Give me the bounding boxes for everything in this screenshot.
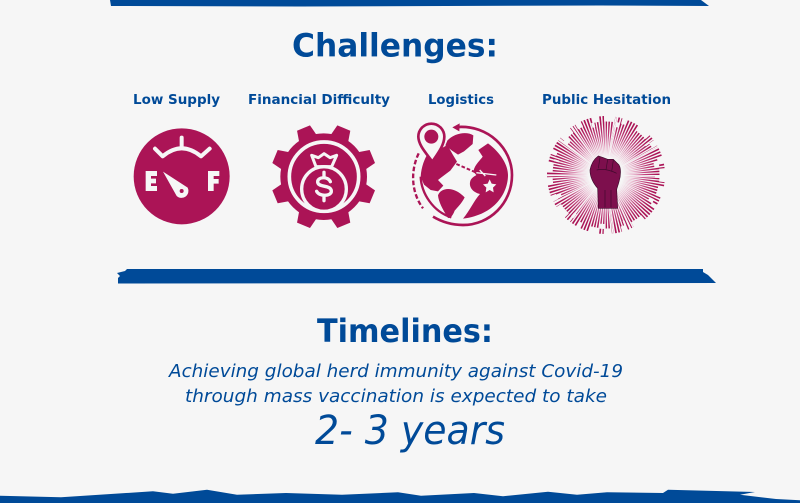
icon: fuel gauge [134,128,230,224]
bottom brush stroke [0,490,800,503]
heading: Timelines: Timelines: [317,312,493,350]
text: timeline description line 2: through mass vaccination is expected to take [185,386,607,407]
icon: gear with money bag [271,124,376,229]
label: Public Hesitation: Public Hesitation [542,92,671,108]
title: Challenges: Challenges: [292,26,498,64]
label: Low Supply: Low Supply [133,92,220,108]
top brush stroke [110,0,709,6]
label: Logistics: Logistics [428,92,494,108]
middle brush stroke [117,269,716,284]
text: 2-3 years: 2- 3 years [315,408,505,454]
text: timeline description line 1: Achieving global herd immunity against Covid-19 [168,361,623,382]
label: Financial Difficulty: Financial Difficulty [248,92,390,108]
icon: globe with location pin [413,123,512,225]
icon: raised fist with radiating lines [550,118,662,232]
